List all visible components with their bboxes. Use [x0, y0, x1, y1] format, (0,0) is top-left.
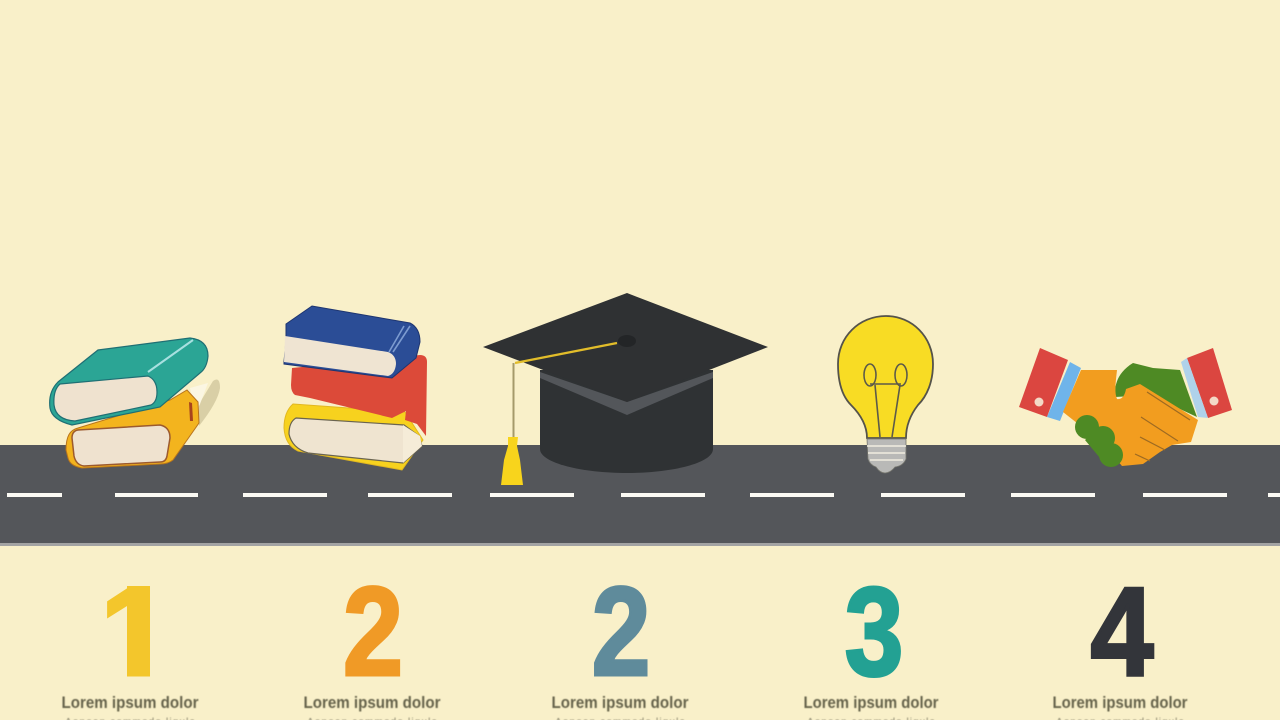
step 2 [304, 561, 441, 720]
infographic canvas [0, 293, 1280, 720]
step 5 heading: Lorem ipsum dolor [1052, 693, 1188, 712]
step 2 heading: Lorem ipsum dolor [304, 693, 441, 712]
road [0, 445, 1280, 546]
tassel cord [515, 343, 617, 363]
step 5 [1052, 561, 1188, 720]
step 1 [62, 586, 199, 720]
icon: graduation cap [483, 293, 768, 485]
icon: tassel [501, 437, 523, 485]
number 2, slate blue: 2 [592, 561, 650, 702]
step 4 [804, 561, 939, 720]
icon: three stacked books, blue, red and yellow [284, 306, 427, 470]
icon: light bulb [838, 316, 933, 473]
lower fingers [1075, 415, 1123, 467]
step 4 heading: Lorem ipsum dolor [804, 693, 939, 712]
number 2, orange: 2 [343, 561, 403, 702]
step 3 [552, 561, 689, 720]
number 1 [107, 586, 150, 676]
number 1: 1 [100, 561, 170, 702]
step 1 heading: Lorem ipsum dolor [62, 693, 199, 712]
step 3 heading: Lorem ipsum dolor [552, 693, 689, 712]
icon: two stacked books, teal and orange [50, 338, 220, 468]
number 4, charcoal: 4 [1090, 561, 1154, 702]
number 3, teal: 3 [845, 561, 903, 702]
road centre dashes [7, 493, 1280, 497]
icon: handshake [1019, 348, 1232, 467]
